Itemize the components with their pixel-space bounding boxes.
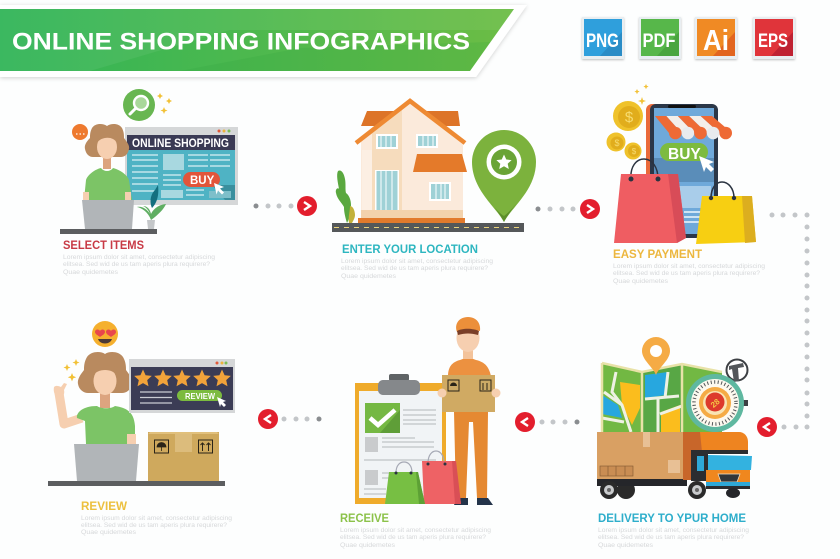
badge: EPS: EPS: [758, 31, 788, 52]
awning: [655, 116, 732, 139]
description text: Lorem ipsum dolor sit amet, consectetur adipiscing: [341, 258, 494, 265]
description text: elitsea. Sed wid de us tam aperis plura requirere?: [341, 265, 489, 272]
table: [48, 481, 225, 486]
heading: select items: SELECT ITEMS: [63, 240, 144, 252]
house: [356, 101, 467, 223]
browser window: [125, 127, 238, 205]
woman waving with laptop: [54, 352, 139, 481]
heading: enter your location: ENTER YOUR LOCATION: [342, 244, 478, 256]
truck: [597, 432, 752, 499]
description text: Quae quidemetes: [598, 542, 653, 549]
description text: Quae quidemetes: [63, 269, 118, 276]
buy button: BUY: [668, 146, 701, 163]
review window: REVIEW: [185, 391, 216, 401]
location pin: [472, 130, 536, 222]
description text: Lorem ipsum dolor sit amet, consectetur adipiscing: [340, 527, 492, 534]
description text: [340, 527, 492, 549]
badge: PDF: PDF: [642, 31, 676, 52]
woman at laptop: [82, 124, 134, 229]
arrow: step 2 to step 3: [536, 199, 600, 219]
arrow: step 1 to step 2: [254, 196, 317, 216]
parcel box: [148, 432, 219, 481]
badge: EPS: [753, 17, 795, 59]
heading: delivery to ypur home: DELIVERY TO YPUR HOME: [598, 513, 746, 525]
description text: elitsea. Sed wid de us tam aperis plura requirere?: [598, 534, 745, 541]
badge: PDF: [639, 17, 681, 59]
description text: Lorem ipsum dolor sit amet, consectetur adipiscing: [63, 254, 216, 261]
window heading: ONLINE SHOPPING: [132, 138, 229, 150]
sparkles: [64, 359, 80, 381]
description text: [63, 254, 216, 276]
description text: Quae quidemetes: [81, 529, 136, 536]
step 6: delivery to your home: [597, 337, 752, 549]
description text: elitsea. Sed wid de us tam aperis plura requirere?: [613, 270, 761, 277]
heading: review: REVIEW: [81, 501, 127, 513]
badge: PNG: PNG: [586, 31, 619, 52]
red bag: [422, 451, 461, 504]
icon: coins: $: [614, 138, 620, 148]
road: [332, 223, 524, 232]
heading: receive: RECEIVE: [340, 513, 389, 525]
arrow: step 3 to step 6 dotted path: [757, 212, 810, 437]
buy button: [660, 143, 714, 172]
format badges: [582, 17, 795, 59]
description text: Quae quidemetes: [613, 278, 668, 285]
map: [602, 363, 722, 432]
badge: Ai: [695, 17, 737, 59]
step 4: review: [48, 321, 235, 536]
step 3: easy payment: [606, 84, 766, 285]
buy button: [183, 172, 220, 187]
browser window: BUY: [190, 175, 215, 187]
description text: elitsea. Sed wid de us tam aperis plura requirere?: [63, 261, 211, 268]
icon: magnifier: [123, 89, 172, 121]
plant: [336, 170, 355, 223]
arrow: step 6 to step 5: [515, 412, 580, 432]
delivery man: [438, 317, 500, 505]
step 5: receive: [340, 317, 500, 549]
review button: [177, 390, 222, 401]
badge: Ai: Ai: [703, 25, 729, 57]
description text: Lorem ipsum dolor sit amet, consectetur adipiscing: [613, 263, 766, 270]
yellow shopping bag: [696, 182, 756, 244]
green bag: [385, 462, 425, 504]
description text: [81, 515, 233, 536]
plant: [137, 185, 166, 229]
arrow: step 5 to step 4: [258, 409, 322, 429]
review window: [129, 359, 235, 413]
description text: [598, 527, 750, 549]
description text: [613, 263, 766, 285]
check mark: [365, 403, 400, 433]
description text: Quae quidemetes: [340, 542, 395, 549]
clipboard: [355, 374, 446, 504]
icon: coins: $: [632, 147, 637, 156]
stopwatch: [686, 360, 748, 432]
map pin: [642, 337, 670, 375]
icon: coins: $: [625, 109, 634, 126]
table: [60, 229, 157, 234]
description text: Lorem ipsum dolor sit amet, consectetur adipiscing: [598, 527, 750, 534]
title banner: [0, 5, 527, 77]
five stars: [134, 370, 231, 386]
icon: chat bubble: [72, 124, 88, 140]
red shopping bag: [614, 159, 686, 243]
stopwatch: 28: [709, 397, 722, 410]
description text: [341, 258, 494, 280]
icon: coins: [606, 84, 649, 160]
phone: [646, 104, 718, 238]
icon: heart-eyes emoji: [92, 321, 118, 347]
heading: easy payment: EASY PAYMENT: [613, 249, 702, 261]
badge: PNG: [582, 17, 624, 59]
description text: elitsea. Sed wid de us tam aperis plura requirere?: [340, 534, 487, 541]
description text: elitsea. Sed wid de us tam aperis plura requirere?: [81, 522, 228, 529]
description text: Quae quidemetes: [341, 273, 396, 280]
step 1: select items: [60, 89, 238, 276]
step 2: enter your location: [332, 101, 536, 280]
description text: Lorem ipsum dolor sit amet, consectetur adipiscing: [81, 515, 233, 522]
title text: ONLINE SHOPPING INFOGRAPHICS: [12, 28, 470, 56]
